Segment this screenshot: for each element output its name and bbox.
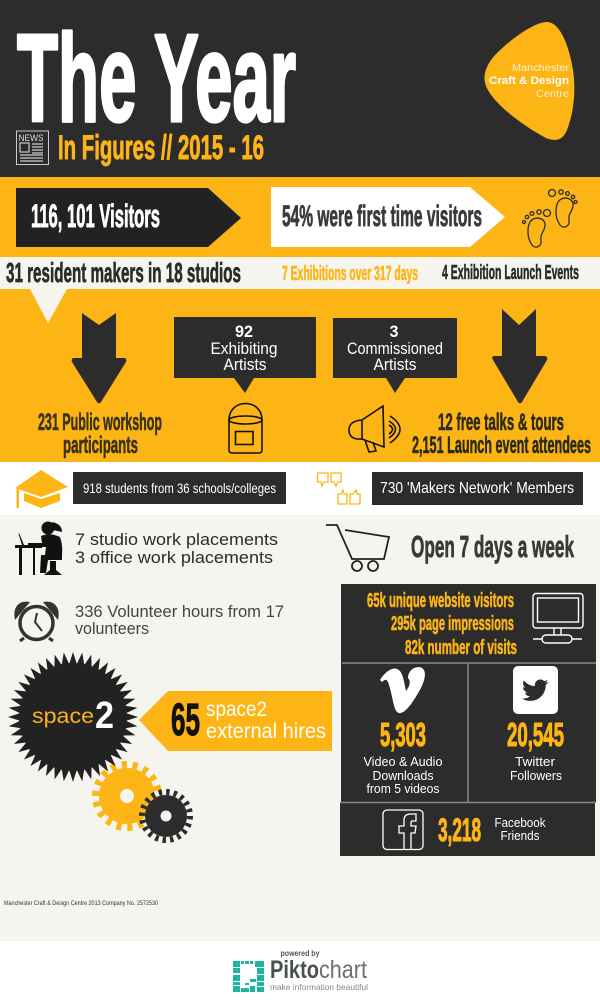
external hires arrow: space2 xyxy=(206,698,267,721)
external hires arrow: 65 xyxy=(171,694,200,745)
logo blob: Centre xyxy=(536,88,569,100)
visitors arrow: 116, 101 Visitors xyxy=(31,198,160,234)
icon: alarm clock xyxy=(14,602,59,641)
icon: post box xyxy=(229,404,262,453)
callout: commissioned artists: Commissioned xyxy=(347,340,443,358)
panel: digital stats xyxy=(340,584,596,856)
website stats: 82k number of visits xyxy=(405,637,517,659)
callout: exhibiting artists: 92 xyxy=(235,322,253,341)
callout: commissioned artists xyxy=(333,318,457,393)
space2 starburst badge: 2 xyxy=(95,695,114,737)
work placements text xyxy=(75,530,278,567)
twitter stat xyxy=(507,716,564,783)
visitors arrow xyxy=(16,188,241,247)
makers network box: 730 'Makers Network' Members xyxy=(380,480,574,497)
callout: commissioned artists: 3 xyxy=(390,322,398,341)
logo blob: Manchester xyxy=(512,62,570,74)
vimeo stat xyxy=(364,716,442,796)
volunteer hours text: 336 Volunteer hours from 17 xyxy=(75,602,284,621)
piktochart branding: chart xyxy=(319,956,367,984)
subtitle: In Figures // 2015 - 16 xyxy=(58,129,264,167)
vimeo stat: 5,303 xyxy=(380,716,426,753)
icon: facebook xyxy=(383,810,423,850)
callout: exhibiting artists: Exhibiting xyxy=(210,340,278,358)
vimeo stat: Video & Audio xyxy=(364,754,442,769)
icon: shopping cart xyxy=(326,525,389,571)
arrow: right down xyxy=(492,309,547,404)
external hires arrow xyxy=(139,691,332,751)
volunteer hours text xyxy=(75,602,284,638)
resident makers stat: 31 resident makers in 18 studios xyxy=(6,257,241,288)
logo blob: Craft & Design xyxy=(489,75,569,87)
makers network box xyxy=(372,472,583,505)
work placements text: 7 studio work placements xyxy=(75,530,278,549)
icon: newspaper xyxy=(16,131,48,164)
arrow: left down xyxy=(72,313,126,404)
footer credit: Manchester Craft & Design Centre 2013 Company No. 2572530 xyxy=(4,901,159,907)
icon: newspaper: NEWS xyxy=(18,133,44,143)
white pointer xyxy=(30,289,67,323)
workshop participants stat xyxy=(38,409,162,459)
facebook stat: 3,218 xyxy=(438,812,481,848)
website stats xyxy=(367,590,517,659)
exhibitions stat: 7 Exhibitions over 317 days xyxy=(282,263,418,285)
yellow gear xyxy=(96,765,158,827)
space2 starburst badge xyxy=(5,649,141,785)
vimeo stat: from 5 videos xyxy=(366,781,440,796)
talks and attendees stat xyxy=(412,409,591,459)
icon: vimeo xyxy=(380,667,425,713)
callout: exhibiting artists: Artists xyxy=(224,356,266,374)
facebook stat: Facebook xyxy=(494,815,546,830)
icon: monitor xyxy=(533,594,583,643)
first time visitors arrow xyxy=(271,187,505,247)
piktochart branding: make information beautiful xyxy=(270,982,368,992)
logo blob xyxy=(484,22,574,140)
piktochart branding: Pikto xyxy=(270,956,319,984)
twitter stat: Twitter xyxy=(515,754,556,769)
work placements text: 3 office work placements xyxy=(75,548,273,567)
students box: 918 students from 36 schools/colleges xyxy=(83,480,276,496)
callout: commissioned artists: Artists xyxy=(374,356,416,374)
space2 starburst badge: space xyxy=(32,705,94,728)
students box xyxy=(73,472,286,504)
facebook stat: Friends xyxy=(500,828,540,843)
workshop participants stat: participants xyxy=(63,432,138,459)
icon: footprints xyxy=(522,190,577,247)
twitter stat: Followers xyxy=(510,768,562,783)
icon: piktochart logo xyxy=(233,961,264,992)
workshop participants stat: 231 Public workshop xyxy=(38,409,162,436)
piktochart branding: powered by xyxy=(280,949,320,958)
volunteer hours text: volunteers xyxy=(75,619,149,638)
piktochart branding xyxy=(233,949,368,992)
callout: exhibiting artists xyxy=(174,317,316,393)
icon: twitter xyxy=(513,666,558,714)
dark gear xyxy=(142,792,190,840)
icon: person at desk xyxy=(15,522,62,575)
vimeo stat: Downloads xyxy=(372,768,434,783)
icon: megaphone xyxy=(349,406,400,452)
title: The Year xyxy=(17,10,296,148)
external hires arrow: external hires xyxy=(206,720,326,743)
icon: speech marks xyxy=(318,473,360,504)
icon: graduation cap xyxy=(15,470,68,508)
